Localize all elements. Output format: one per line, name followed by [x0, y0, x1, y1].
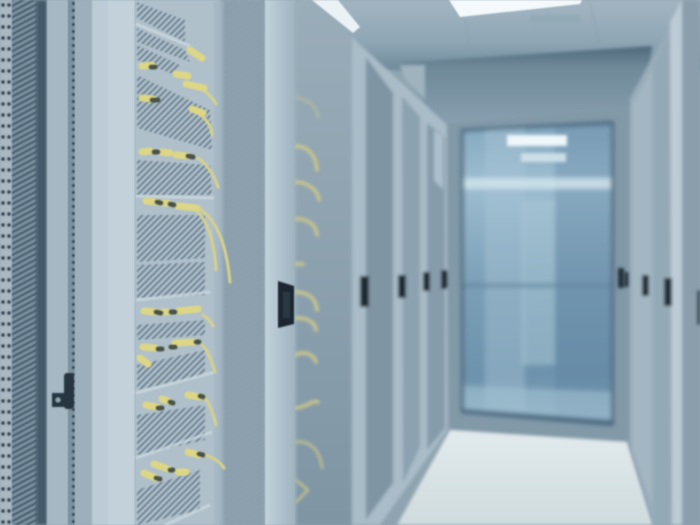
- left rack row: far doors: [295, 0, 447, 525]
- back wall: [400, 46, 652, 130]
- shelf highlights: [136, 24, 215, 525]
- server panel with equipment: [135, 0, 220, 525]
- ceiling: [300, 0, 700, 70]
- cables in second rack: [295, 97, 322, 502]
- front rack: dark mesh panel: [12, 0, 37, 525]
- connectors: [140, 50, 204, 478]
- top light strip: [312, 0, 360, 33]
- glass reflected lights: [507, 135, 567, 162]
- far door handles: [360, 270, 447, 307]
- light inner strip: [214, 0, 224, 525]
- glass door: [461, 121, 614, 426]
- grey mesh door section: [224, 0, 265, 525]
- front rack: grey side panel: [47, 0, 68, 525]
- front rack: dotted rail: [68, 0, 75, 525]
- front rack: punched rail: [0, 0, 12, 525]
- ceiling light panel: [449, 0, 582, 17]
- right rack handles: [618, 268, 700, 325]
- front rack: dark upright: [36, 0, 47, 525]
- door post: [265, 0, 295, 525]
- front rack: frame uprights: [75, 0, 135, 525]
- wall box above racks: [400, 65, 425, 100]
- floor: [397, 430, 653, 525]
- connector collars: [151, 67, 203, 479]
- end door frame: [445, 108, 630, 442]
- hinge bracket: [52, 373, 74, 409]
- equipment hatch blocks: [137, 2, 212, 525]
- door handle: [278, 281, 294, 328]
- fiber cables: [140, 50, 230, 479]
- right rack row: [618, 0, 700, 525]
